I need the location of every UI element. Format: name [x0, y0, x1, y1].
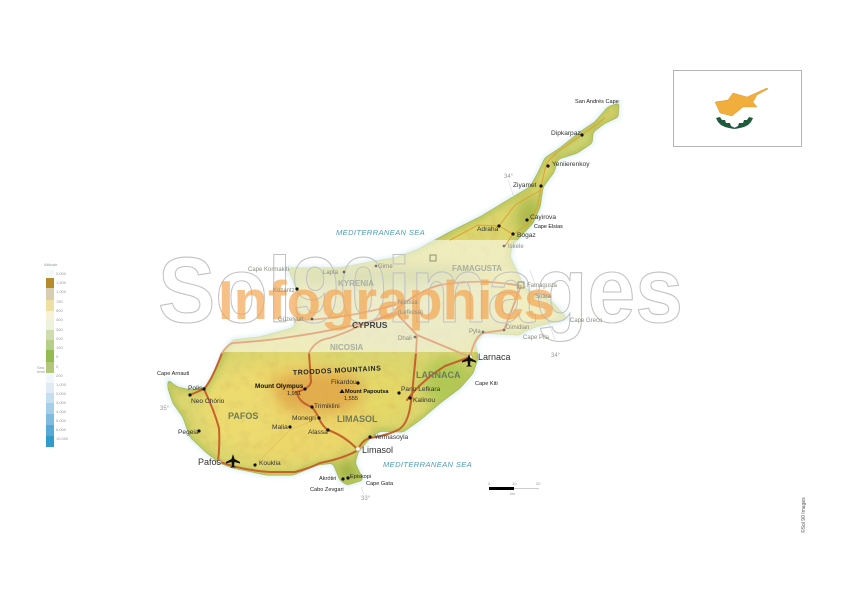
place names: Mount Olympus — [255, 383, 304, 390]
elevation legend — [37, 262, 69, 447]
place names: Episkopi — [350, 474, 371, 480]
sea level label: level — [37, 369, 45, 374]
scale bar: 10 — [512, 481, 517, 486]
place names: Yermasoyla — [374, 434, 409, 441]
district labels: LIMASOL — [337, 414, 378, 424]
legend values: 1,500 — [56, 280, 67, 285]
legend values: 500 — [56, 308, 63, 313]
place names: Dhali — [398, 336, 412, 342]
legend values: 3,000 — [56, 400, 67, 405]
legend values: 0 — [56, 354, 59, 359]
place names: Cape Elsias — [534, 224, 563, 230]
flag of Cyprus — [674, 70, 802, 146]
watermark: Infographics: Infographics — [218, 269, 555, 331]
place names: Kalinou — [413, 397, 435, 404]
district labels: LARNACA — [416, 370, 461, 380]
sea labels — [336, 228, 472, 469]
sea level label: Sea — [37, 365, 44, 370]
place names: Mount Papoutsa — [345, 389, 389, 395]
relief texture — [178, 226, 498, 464]
graticule labels: 35° — [160, 406, 170, 412]
icon: mountain peak — [340, 389, 344, 393]
legend colour scale — [46, 270, 54, 447]
district labels: FAMAGUSTA — [452, 264, 502, 273]
place names: Sotira — [535, 294, 551, 300]
label: lower sea: MEDITERRANEAN SEA — [383, 460, 472, 469]
place names: Akrótiri — [319, 476, 336, 482]
place names: Kouklia — [259, 460, 281, 467]
place names: Trimiklini — [314, 403, 340, 410]
legend values: 2,000 — [56, 271, 67, 276]
place names: Neo Chório — [191, 398, 225, 405]
scale bar — [488, 481, 541, 496]
place names: Monegri — [292, 415, 316, 422]
place names: Cape Gata — [366, 481, 394, 487]
pale watermark band — [224, 240, 566, 352]
place names: Limasol — [362, 445, 393, 455]
place names: Cape Pila — [523, 335, 550, 341]
place names: 1,951 — [287, 391, 301, 397]
faded roads, upper band — [222, 282, 521, 357]
legend values: 400 — [56, 317, 63, 322]
place names: Pafos — [198, 457, 222, 467]
place names: 1,555 — [344, 396, 358, 402]
district labels: NICOSIA — [330, 343, 364, 352]
place names: Polis — [188, 385, 203, 392]
graticule labels: 34° — [504, 174, 514, 180]
legend values: 2,000 — [56, 391, 67, 396]
copyright: ©Sol 90 Images — [800, 497, 807, 533]
place names: Pegeia — [178, 429, 199, 436]
watermark: Sol90images: Sol90images — [158, 238, 683, 342]
map: island terrain — [150, 90, 630, 490]
place names: Cabo Zevgari — [310, 487, 344, 493]
icon: Larnaca airport — [462, 354, 476, 366]
coastal green fringe — [168, 103, 619, 485]
place names: Nicosia — [398, 300, 418, 306]
legend values: 750 — [56, 299, 63, 304]
place names: Pano Lefkara — [401, 386, 441, 393]
icon: Pafos airport — [226, 454, 240, 468]
legend values: 0 — [56, 364, 59, 369]
place names: Larnaca — [478, 352, 511, 362]
legend values: 10,000 — [56, 436, 69, 441]
scale bar: km — [510, 491, 516, 496]
place names: Cayirova — [530, 214, 556, 221]
place names: Dipkarpaz — [551, 130, 581, 137]
place names: Malia — [272, 424, 288, 431]
main roads, lower island — [190, 353, 470, 472]
place names: Yeniierenkoy — [552, 161, 590, 168]
legend values: 200 — [56, 336, 63, 341]
place names: Famagusta — [527, 283, 558, 289]
legend values: 6,000 — [56, 427, 67, 432]
legend values: 200 — [56, 373, 63, 378]
district labels — [228, 264, 502, 424]
graticule labels: 34° — [551, 353, 561, 359]
coast glow — [168, 103, 619, 485]
legend values: 4,000 — [56, 409, 67, 414]
place names: Fikardou — [331, 379, 357, 386]
place names: Cape Greco — [570, 318, 603, 324]
roads — [190, 118, 605, 472]
place names: (Lefkosa) — [398, 310, 423, 316]
label: upper sea: MEDITERRANEAN SEA — [336, 228, 425, 237]
elevation legend: Altitude — [44, 262, 58, 267]
place names: Cape Kormakiti — [248, 267, 289, 273]
country name: CYPRUS — [352, 320, 388, 330]
place names: Ziyamet — [513, 182, 537, 189]
place names: Cape Kiti — [475, 381, 498, 387]
place names — [157, 99, 619, 493]
mountain range label: TROODOS MOUNTAINS — [293, 365, 382, 377]
flag olive branches — [716, 117, 753, 129]
city markers — [188, 133, 584, 481]
legend values: 1,000 — [56, 289, 67, 294]
place names: Iskele — [508, 244, 524, 250]
place names: Dimidian — [506, 325, 529, 331]
legend values: 5,000 — [56, 418, 67, 423]
graticule labels — [160, 174, 561, 502]
legend values: 1,000 — [56, 382, 67, 387]
place names: Pyla — [469, 329, 481, 335]
place names: Adraha — [477, 226, 499, 233]
district labels: KYRENIA — [338, 279, 374, 288]
legend values: 100 — [56, 345, 63, 350]
place names: Cape Arnauti — [157, 371, 189, 377]
flag island — [715, 88, 768, 116]
place names: Alassa — [308, 429, 328, 436]
place names: San Andrés Cape — [575, 99, 619, 105]
place names: Lapta — [323, 270, 339, 276]
place names: Kozantz — [273, 288, 295, 294]
district labels: PAFOS — [228, 411, 258, 421]
place names: Bogaz — [517, 232, 536, 239]
scale bar: 20 — [536, 481, 541, 486]
minor roads — [255, 118, 605, 465]
legend values: 300 — [56, 327, 63, 332]
legend values — [56, 271, 69, 441]
place names: Girne — [378, 264, 393, 270]
place names: Güzelyurt — [278, 317, 304, 323]
graticule labels: 33° — [361, 496, 371, 502]
scale bar: 0 — [488, 481, 491, 486]
